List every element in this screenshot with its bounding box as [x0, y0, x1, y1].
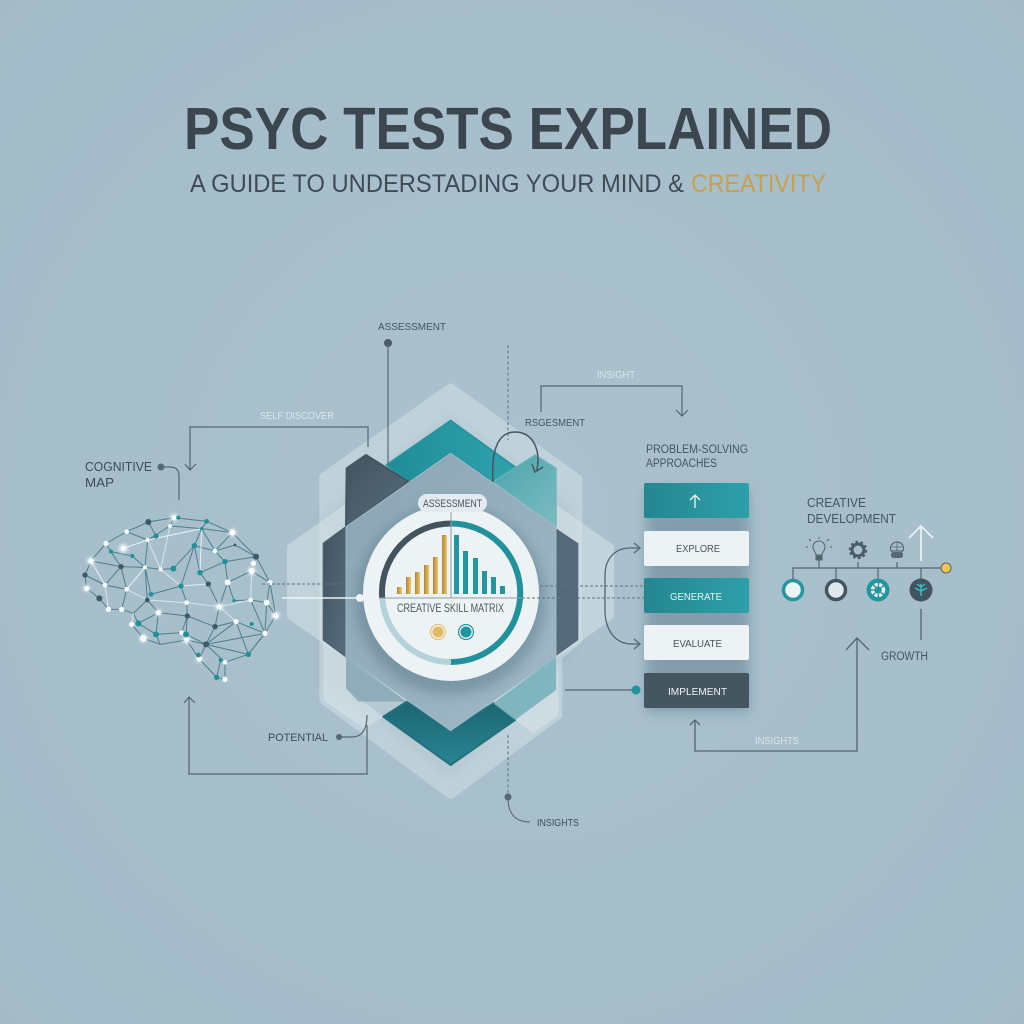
- heading: problem-solving approaches: PROBLEM-SOLVING: [646, 444, 748, 456]
- arrow: potential bracket: [184, 697, 367, 774]
- step: explore: EXPLORE: [676, 543, 720, 555]
- label: cognitive map: MAP: [85, 475, 114, 490]
- step: evaluate: [644, 625, 749, 660]
- connector: potential: [336, 715, 367, 740]
- arrow: insights feedback: [690, 638, 869, 751]
- lower-left translucent band: [346, 657, 407, 702]
- axis lines: [380, 512, 522, 598]
- label: cognitive map: COGNITIVE: [85, 459, 152, 474]
- heading: creative development: CREATIVE: [807, 496, 866, 510]
- legend: gold dot: [430, 624, 446, 640]
- label: cognitive map: [85, 459, 152, 490]
- marker: yellow end dot: [941, 563, 951, 573]
- dark left panel: [323, 527, 346, 657]
- light wedge lower right: [493, 657, 558, 733]
- step: up arrow: [644, 483, 749, 518]
- step: implement: IMPLEMENT: [668, 686, 728, 698]
- step: implement: [644, 673, 749, 708]
- teal bottom chevron: [383, 702, 515, 765]
- subtitle: CREATIVITY: [691, 170, 826, 198]
- panel: approaches steps: [644, 483, 749, 712]
- label: insight: INSIGHT: [597, 370, 635, 381]
- icon: lightbulb: [806, 537, 832, 560]
- connector: vertical dashed axis: [507, 345, 509, 797]
- connector: assessment pin: [384, 339, 392, 465]
- assessment chart dial: [363, 494, 539, 681]
- timeline: [784, 560, 951, 602]
- assessment pill: ASSESSMENT: [423, 498, 482, 510]
- connector: dial to generate: [522, 586, 645, 598]
- milestone: flower: [866, 578, 890, 602]
- central layered hexagon: [289, 387, 612, 795]
- label: rsgesment: RSGESMENT: [525, 417, 586, 429]
- arrow: curved loop: [493, 432, 543, 482]
- dark upper-left panel: [346, 455, 408, 527]
- step: explore: [644, 531, 749, 566]
- dial disc: [363, 505, 539, 681]
- light teal lower-right panel: [493, 657, 556, 720]
- heading: problem-solving approaches: [646, 444, 748, 470]
- heading: creative development: [807, 496, 896, 526]
- dial shadow: [356, 505, 546, 695]
- connector: growth: [920, 609, 922, 640]
- legend: teal dot: [458, 624, 474, 640]
- icon: cognitive map brain: [82, 514, 280, 682]
- arrow: growth up: [909, 526, 933, 561]
- assessment pill: [418, 494, 487, 512]
- milestone: teal ring: [784, 580, 802, 600]
- connector: to implement: [565, 686, 640, 694]
- label: assessment: ASSESSMENT: [378, 321, 447, 333]
- heading: problem-solving approaches: APPROACHES: [646, 458, 717, 470]
- milestone: dark ring: [826, 580, 846, 600]
- step: generate: [644, 578, 749, 613]
- gold bars: [397, 535, 447, 594]
- arrow: insight bracket: [541, 386, 688, 416]
- central translucent panel: [346, 453, 556, 731]
- step: generate: GENERATE: [670, 591, 722, 603]
- connector: insights lower: [504, 794, 530, 822]
- title: PSYC TESTS EXPLAINED: [184, 96, 832, 162]
- icon: gear: [850, 542, 866, 558]
- label: self discover: SELF DISCOVER: [260, 411, 334, 422]
- step: evaluate: EVALUATE: [673, 638, 722, 650]
- teal bars: [454, 535, 505, 594]
- teal top chevron: [387, 421, 517, 482]
- label: growth: GROWTH: [881, 651, 928, 663]
- light teal upper-right panel: [493, 455, 556, 527]
- icon: mind dome: [890, 542, 904, 558]
- label: insights right: INSIGHTS: [755, 736, 799, 747]
- dark right panel: [556, 528, 578, 656]
- milestone: tree: [910, 578, 932, 602]
- progress rings: [382, 524, 520, 662]
- label: insights lower: INSIGHTS: [537, 818, 579, 829]
- chart caption: CREATIVE SKILL MATRIX: [397, 603, 504, 615]
- heading: creative development: DEVELOPMENT: [807, 512, 896, 526]
- connector: cognitive map to brain: [158, 464, 179, 500]
- subtitle: A GUIDE TO UNDERSTADING YOUR MIND &: [190, 170, 684, 198]
- label: potential: POTENTIAL: [268, 732, 328, 744]
- arrow: self discover bracket: [185, 427, 368, 470]
- light wedge lower left: [323, 642, 383, 729]
- connector: brain to dial: [262, 584, 364, 602]
- arrow: fork to explore and evaluate: [605, 543, 640, 649]
